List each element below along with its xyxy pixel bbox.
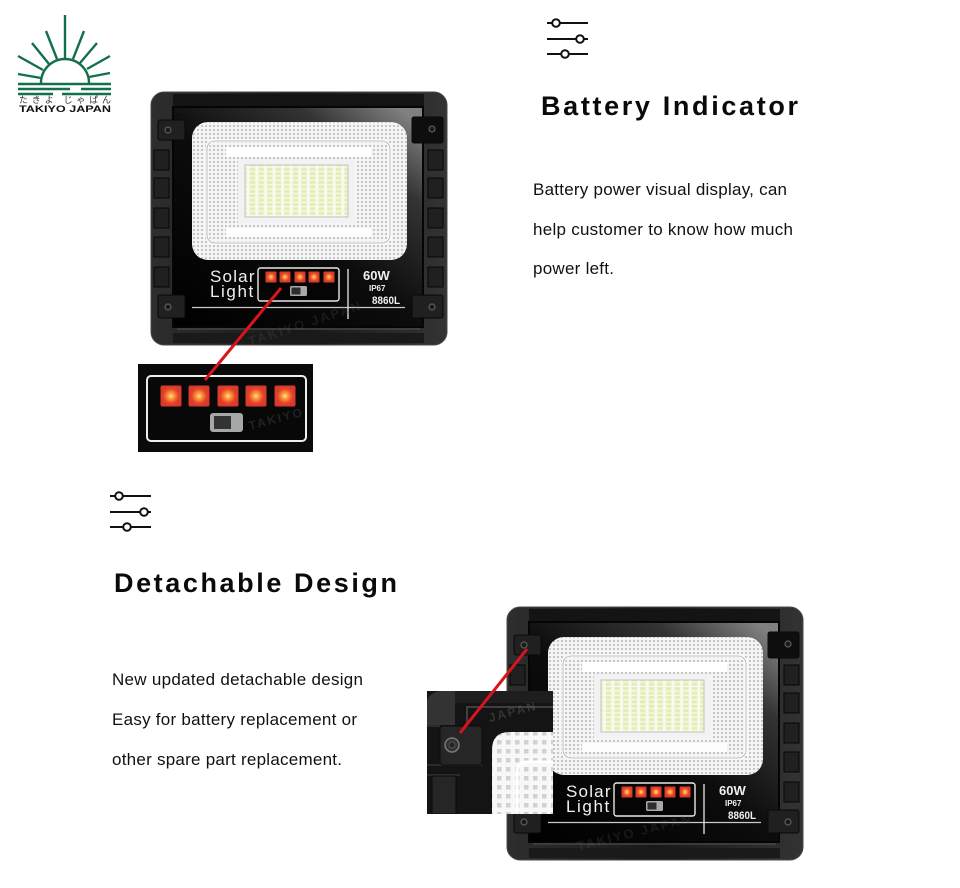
arrow: screw pointer bbox=[460, 649, 527, 733]
logo: Takiyo Japan bbox=[18, 15, 111, 115]
icon: sliders, battery section bbox=[547, 19, 588, 58]
logo kana: たきよ じゃぱん bbox=[19, 95, 111, 105]
lamp label: 8860L bbox=[372, 295, 400, 307]
text: detachable description: other spare part replacement. bbox=[112, 750, 342, 769]
lamp label bbox=[210, 267, 400, 307]
inset: battery indicator close-up: TAKIYO bbox=[247, 405, 305, 433]
lamp label: Solar bbox=[210, 267, 256, 286]
text: detachable description: New updated detachable design bbox=[112, 670, 363, 689]
lamp label: 60W bbox=[363, 268, 390, 283]
text: battery description: power left. bbox=[533, 259, 614, 278]
inset: detachable screw close-up: JAPAN bbox=[487, 698, 539, 725]
lamp label: Solar bbox=[566, 782, 612, 801]
text: battery description bbox=[533, 180, 793, 278]
icon: rising sun bbox=[18, 15, 111, 94]
inset: detachable screw close-up bbox=[427, 691, 560, 820]
logo wordmark: TAKIYO JAPAN bbox=[19, 104, 111, 115]
lamp label: Light bbox=[210, 282, 255, 301]
lamp label: 8860L bbox=[728, 810, 756, 822]
text: battery description: help customer to know how much bbox=[533, 220, 793, 239]
inset: battery indicator close-up bbox=[138, 364, 313, 452]
lamp label bbox=[566, 782, 756, 822]
lamp label: Light bbox=[566, 797, 611, 816]
product photo: solar light, detachable section bbox=[507, 607, 803, 860]
heading: Detachable Design: Detachable Design bbox=[114, 568, 397, 598]
text: battery description: Battery power visual display, can bbox=[533, 180, 787, 199]
lamp label: 60W bbox=[719, 783, 746, 798]
arrow: battery indicator pointer bbox=[205, 288, 281, 380]
lamp label: IP67 bbox=[725, 799, 742, 808]
text: detachable description: Easy for battery replacement or bbox=[112, 710, 357, 729]
text: detachable description bbox=[112, 670, 363, 769]
product photo: solar light, battery section bbox=[151, 92, 447, 349]
product photo: solar light, battery section: TAKIYO JAPAN bbox=[246, 298, 364, 349]
heading: Battery Indicator: Battery Indicator bbox=[541, 91, 798, 121]
icon: sliders, detachable section bbox=[110, 492, 151, 531]
product photo: solar light, detachable section: TAKIYO JAPAN bbox=[575, 811, 694, 854]
lamp label: IP67 bbox=[369, 284, 386, 293]
